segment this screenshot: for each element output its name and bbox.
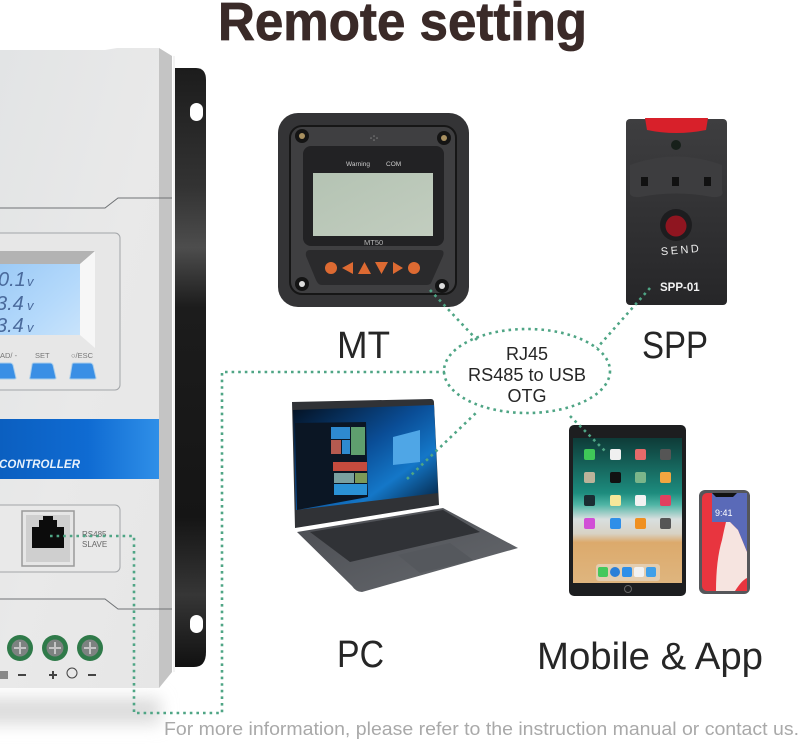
footer note: For more information, please refer to the instruction manual or contact us.: [164, 719, 799, 739]
dock: [596, 564, 660, 581]
MT remote meter: [278, 113, 469, 307]
send button: [660, 209, 692, 241]
blue product strip: CONTROLLER: [0, 459, 81, 471]
lcd screen: [0, 264, 80, 335]
terminal symbols: [0, 668, 96, 679]
terminal screws: [7, 635, 103, 661]
lcd bezel: [0, 251, 95, 264]
device labels: [337, 325, 763, 678]
label: MT: MT: [337, 325, 390, 367]
home button: [624, 586, 632, 592]
laptop lid: [292, 399, 439, 528]
lcd readings: v: [27, 320, 35, 335]
RS485 port panel: SLAVE: [82, 540, 107, 549]
mounting bracket: [175, 68, 206, 667]
display panel: [0, 233, 120, 390]
button labels: [0, 351, 94, 360]
lcd readings: v: [27, 274, 35, 289]
phone: 9:41: [715, 508, 733, 518]
send label: SEND: [660, 243, 702, 258]
keyboard: [310, 510, 480, 562]
meter LCD: [313, 173, 433, 236]
tablet: [569, 425, 686, 596]
windows logo panes: [393, 430, 420, 465]
meter face: [303, 146, 444, 246]
charge controller device: [0, 48, 206, 724]
blue product strip: [0, 419, 159, 479]
RS485 port panel: [0, 505, 120, 572]
label: Mobile and App: Mobile & App: [537, 636, 763, 678]
label: SPP: SPP: [642, 325, 708, 367]
lcd readings: [0, 269, 35, 337]
remote switches: [641, 177, 711, 186]
start menu tiles: [295, 422, 368, 510]
tablet and phone: [569, 425, 750, 596]
dotted connection lines: [50, 288, 650, 713]
button labels: ○/ESC: [71, 351, 94, 360]
button labels: SET: [35, 351, 50, 360]
body seams: [0, 198, 172, 609]
RJ45 socket: [22, 511, 74, 566]
button labels: AD/ -: [0, 351, 18, 360]
touchpad: [398, 543, 473, 573]
windows screen: [293, 405, 438, 510]
meter keypad: [306, 250, 444, 285]
buttons: [0, 363, 16, 379]
connection hub text: [468, 344, 586, 406]
phone: [699, 490, 750, 594]
meter labels: Warning: [346, 161, 370, 168]
SPP remote: [626, 118, 727, 305]
floor shadow: [0, 698, 160, 724]
app icons: [584, 449, 671, 529]
label: PC: PC: [337, 634, 384, 676]
connection hub text: RJ45: [506, 344, 548, 364]
device body: [0, 48, 172, 688]
MT remote meter: MT50: [364, 238, 383, 247]
model label: SPP-01: [660, 282, 700, 294]
laptop PC: [292, 399, 518, 592]
port label: RS485: [82, 530, 107, 539]
lcd readings: v: [27, 298, 35, 313]
speaker dots: [371, 136, 377, 140]
connection hub ellipse: [444, 329, 610, 413]
connection hub text: RS485 to USB: [468, 365, 586, 385]
laptop base: [297, 508, 518, 592]
connection hub text: OTG: [508, 386, 546, 406]
MT remote meter: COM: [386, 161, 401, 168]
